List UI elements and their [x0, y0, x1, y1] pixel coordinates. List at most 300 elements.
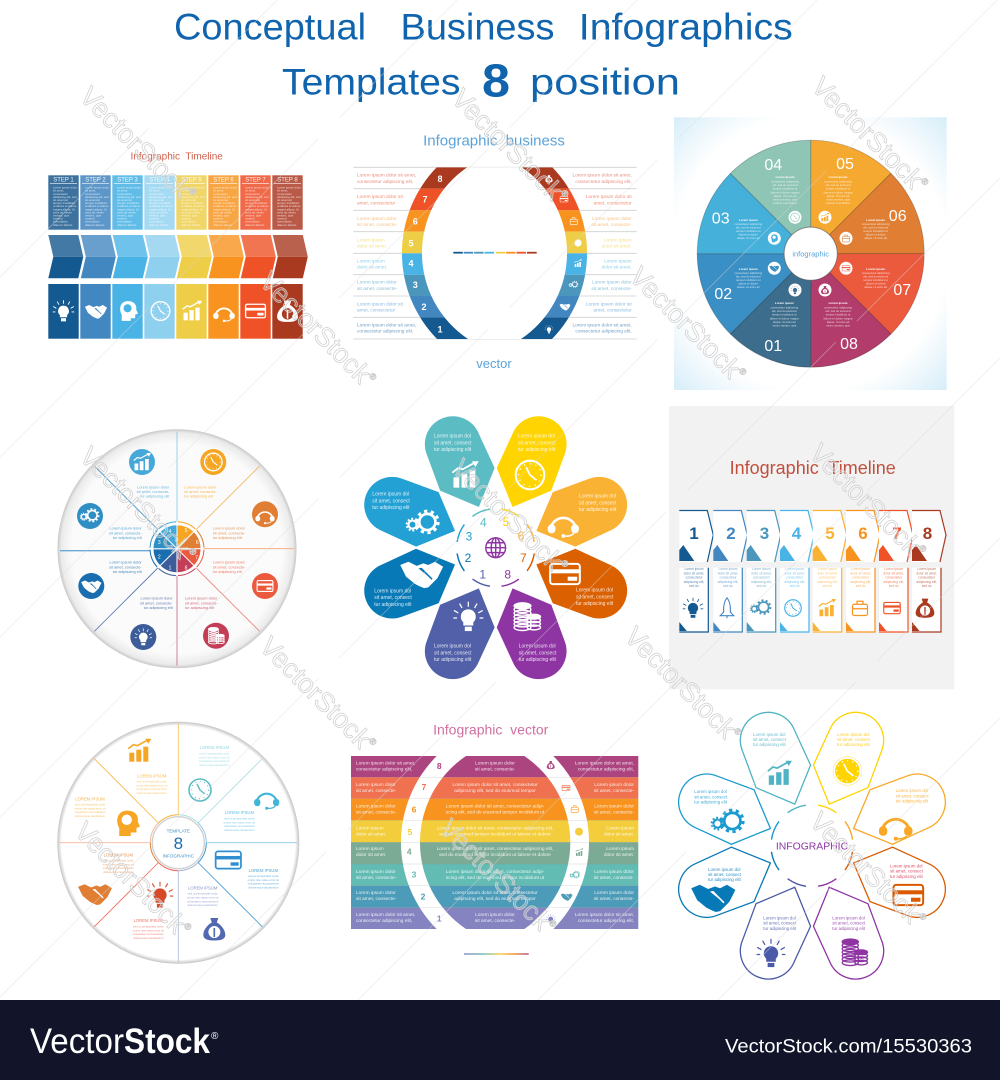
sector text: Lorem ipsum	[866, 218, 885, 222]
sector text: sed ut perspiciatis unde	[199, 752, 229, 756]
sector text: Lorem ipsum dolor	[109, 526, 142, 531]
panel: white disc with lorem ipsum	[57, 722, 299, 964]
sector text: consectetur adipiscing	[824, 180, 852, 184]
sector text: LOREM IPSUM	[134, 918, 163, 923]
petal text: sit amet, consect	[576, 594, 614, 600]
left texts: Lorem ipsum dolor sit amet,	[357, 323, 416, 328]
step text: Lorem ipsum	[752, 567, 771, 571]
top text cards: tempor incididunt	[53, 201, 75, 205]
title: 8	[482, 54, 510, 106]
panel: stripes with crescents	[351, 721, 638, 955]
petal text: Lorem ipsum dol	[434, 434, 471, 440]
top text cards: enim ad minim	[277, 210, 296, 214]
left texts: consectetur adipiscing elit,	[357, 179, 413, 185]
top text cards: exercitation	[277, 220, 292, 224]
footer url: VectorStock.com/15530363	[725, 1037, 972, 1058]
icon discs	[768, 211, 852, 296]
sector text: Lorem ipsum dolor	[140, 596, 173, 601]
right text: Lorem ipsum	[606, 847, 634, 852]
top text cards: tempor incididunt	[181, 201, 203, 205]
top text cards: enim ad minim	[85, 210, 104, 214]
sector text: LOREM IPSUM	[104, 852, 133, 858]
left texts: Lorem ipsum	[357, 259, 385, 264]
top text cards: adipiscing elit, sed	[149, 195, 173, 199]
sector text: doloremque laudantium	[248, 885, 279, 889]
watermarks: VectorStock	[74, 81, 197, 204]
hub label: TEMPLATE	[167, 828, 190, 834]
sector text: consectetur adipiscing	[862, 222, 890, 226]
centre text: scing elit, sed do eiusmod tempor incididunt ut	[446, 875, 545, 881]
sector text: tur adipiscing elit	[185, 605, 215, 610]
title: Infographics	[579, 6, 793, 47]
sector text: labore et dolore	[866, 282, 886, 286]
numbers	[408, 174, 443, 335]
petal text: Lorem ipsum dol	[837, 732, 869, 737]
top text cards: enim ad minim	[181, 210, 200, 214]
arc segments	[402, 167, 588, 339]
step text: dolor sit amet,	[817, 571, 838, 575]
top text cards: consectetur	[117, 192, 132, 196]
pie sectors	[697, 140, 924, 367]
top text cards: exercitation	[181, 220, 196, 224]
top text cards: ullamco laboris	[149, 223, 169, 227]
sector text: tempor incididunt ut	[826, 187, 850, 191]
top text cards: adipiscing elit, sed	[245, 195, 269, 199]
sector text: tur adipiscing elit	[113, 535, 143, 540]
sector text: tur adipiscing elit	[184, 494, 214, 499]
sector text: omnis iste natus error sit	[74, 806, 106, 810]
step text: Lorem ipsum	[785, 567, 804, 571]
sector text: sit amet, consecte-	[109, 564, 142, 569]
top text cards: STEP 3	[117, 178, 138, 184]
left texts: amet, consectetur	[357, 200, 396, 206]
top text cards: adipiscing elit, sed	[53, 195, 77, 199]
sector text: LOREM IPSUM	[200, 745, 229, 750]
left text: Lorem ipsum	[356, 826, 384, 832]
top text cards: sit amet,	[245, 189, 256, 193]
step text: consectetur	[786, 576, 804, 580]
hub pie	[153, 525, 201, 573]
top text cards: STEP 4	[149, 178, 170, 184]
panel: solid petal flower	[355, 407, 636, 688]
sector text: Lorem ipsum dolor	[137, 484, 169, 489]
left texts	[357, 173, 416, 335]
watermarks: ®	[737, 366, 749, 378]
petal text: tur adipiscing elit	[694, 800, 728, 805]
step text: consectetur	[753, 576, 771, 580]
sector text: LOREM IPSUM	[75, 796, 105, 802]
sector text: Lorem ipsum	[866, 267, 885, 271]
petal text: Lorem ipsum dol	[763, 916, 796, 920]
petal text: tur adipiscing elit	[372, 505, 410, 511]
row lines	[351, 777, 638, 908]
sector text: voluptatem accusantium	[136, 787, 168, 791]
top text cards: tempor incididunt	[117, 201, 139, 205]
top text cards: ullamco laboris	[277, 223, 297, 227]
numbers: 02	[714, 286, 732, 303]
top text cards: consectetur	[181, 192, 196, 196]
watermarks: VectorStock	[804, 806, 927, 929]
top text cards: veniam, quis	[213, 214, 230, 218]
right texts: Lorem ipsum	[604, 239, 632, 244]
sector text: minim veniam, quis	[826, 198, 851, 202]
right texts: Lorem ipsum dolor sit	[586, 302, 632, 307]
sector text: voluptatem accusantium	[187, 899, 219, 903]
sector text: Lorem ipsum dolor	[185, 596, 217, 601]
sector text: labore et dolore magna	[824, 316, 853, 320]
step text: dolor sit amet,	[916, 571, 937, 575]
sector text: tempor incididunt ut	[773, 187, 797, 191]
step icons	[683, 598, 934, 618]
petal text: Lorem ipsum dol	[694, 789, 727, 794]
petal text: tur adipiscing elit	[837, 742, 870, 747]
left texts: Lorem ipsum dolor	[357, 217, 397, 222]
top text cards: consectetur	[213, 192, 228, 196]
top text cards: veniam, quis	[277, 214, 294, 218]
panel: step timeline	[48, 151, 308, 339]
centre text	[437, 760, 553, 924]
numbers: 5	[408, 238, 414, 248]
petal text: sit amet, consect	[896, 793, 929, 798]
step text	[684, 567, 937, 588]
centre text: sit amet, consecte-	[475, 766, 516, 772]
watermarks: VectorStock	[624, 261, 747, 384]
numbers: 3	[413, 280, 418, 290]
step text: sed do	[889, 584, 899, 588]
top text cards: do eiusmod	[149, 198, 164, 202]
top text cards: nostrud	[149, 217, 159, 221]
top text cards: ut labore et dolore	[53, 204, 77, 208]
petal text: tur adipiscing elit	[434, 657, 472, 663]
top text cards: consectetur	[245, 192, 260, 196]
left texts: Lorem ipsum dolor sit	[357, 302, 403, 307]
sector text: LOREM IPSUM	[249, 868, 278, 873]
centre dashes	[453, 252, 537, 254]
sector text: elit, sed do eiusmod	[826, 183, 851, 187]
right text: Lorem ipsum dolor	[594, 891, 634, 896]
petal outlines	[670, 703, 954, 988]
right icons	[546, 761, 583, 924]
step text: adipiscing elit,	[684, 580, 704, 584]
top text cards: do eiusmod	[277, 198, 292, 202]
sector text: minim veniam, quis	[826, 324, 851, 328]
petal text: Lorem ipsum dol	[708, 867, 740, 872]
footer logo: ®	[211, 1031, 219, 1042]
step text: sed do	[790, 584, 800, 588]
top text cards: magna aliqua. Ut	[181, 207, 203, 211]
top text cards: ut labore et dolore	[277, 204, 301, 208]
sector text: tempor incididunt ut	[736, 278, 761, 282]
top text cards: Lorem ipsum dolor	[245, 186, 269, 190]
sector text: sed ut perspiciatis unde	[188, 892, 218, 896]
sector text: sit amet, consecte-	[109, 530, 142, 535]
step text: consectetur	[918, 576, 936, 580]
heading: Infographic Timeline	[131, 151, 223, 162]
row lines	[353, 167, 637, 339]
petal text: tur adipiscing elit	[763, 926, 797, 931]
sector text: sit amet, consecte-	[140, 600, 173, 605]
top text cards: ullamco laboris	[245, 223, 265, 227]
step text: adipiscing elit,	[718, 580, 738, 584]
numbers: 06	[889, 208, 907, 225]
sector text: omnis iste natus error sit	[133, 928, 164, 932]
petal text: sit amet, consect	[763, 921, 797, 926]
right text: Lorem ipsum dolor	[594, 783, 634, 788]
step text: sed do	[922, 584, 932, 588]
top text cards: Lorem ipsum dolor	[117, 186, 141, 190]
sector text: consectetur adipiscing	[824, 306, 852, 310]
step numbers: 8	[923, 524, 932, 543]
top text cards: adipiscing elit, sed	[277, 195, 301, 199]
ring numbers: 6	[518, 529, 525, 543]
top text cards: adipiscing elit, sed	[181, 195, 205, 199]
top text cards: sit amet,	[53, 189, 64, 193]
top text cards: nostrud	[117, 217, 127, 221]
sector text: aliqua. Ut enim ad	[864, 236, 887, 240]
top text cards: exercitation	[149, 220, 164, 224]
panel: outlined timeline	[669, 406, 954, 689]
watermarks: ®	[559, 558, 571, 570]
petal text: Lorem ipsum dol	[753, 732, 785, 737]
centre text: Lorem ipsum dolor sit amet, consectetur	[452, 891, 538, 896]
sector text: tur adipiscing elit	[113, 569, 143, 574]
sector text: omnis iste natus error sit	[187, 896, 219, 900]
top text cards: ullamco laboris	[53, 223, 73, 227]
top text cards: ut labore et dolore	[181, 204, 205, 208]
watermarks: ®	[367, 736, 379, 748]
left text: sit amet, consecte-	[356, 875, 397, 881]
sector text: tempor incididunt ut	[863, 229, 888, 233]
top text cards: do eiusmod	[53, 198, 68, 202]
spokes	[60, 432, 294, 666]
centre text: adipiscing elit, sed do eiusmod tempor	[454, 896, 536, 902]
right texts: Lorem ipsum dolor	[592, 281, 632, 286]
top text cards: magna aliqua. Ut	[213, 207, 235, 211]
watermarks: VectorStock	[619, 621, 742, 744]
top text cards: magna aliqua. Ut	[245, 207, 267, 211]
sector text: aliqua. Ut enim ad	[737, 285, 760, 289]
hub label: 8	[174, 834, 183, 853]
petal text: sit amet, consect	[694, 794, 728, 799]
sector text: tur adipiscing elit	[213, 535, 243, 540]
top text cards: consectetur	[85, 192, 100, 196]
numbers	[407, 761, 442, 924]
petal text: Lorem ipsum dol	[374, 588, 411, 594]
petal text: sit amet, consect	[374, 595, 412, 601]
top text cards: magna aliqua. Ut	[53, 207, 75, 211]
sector text: elit, sed do eiusmod	[772, 309, 797, 313]
right text: sit amet, consecte-	[594, 788, 634, 794]
petal text: Lorem ipsum dol	[579, 494, 616, 500]
sector text: tur adipiscing elit	[213, 569, 243, 574]
top text cards: STEP 2	[85, 178, 106, 184]
top text cards: do eiusmod	[117, 198, 132, 202]
step text: consectetur	[719, 576, 737, 580]
left texts: Lorem ipsum dolor sit	[357, 195, 403, 200]
left texts: consectetur adipiscing elit,	[357, 329, 413, 335]
right text: Lorem ipsum dolor	[594, 870, 634, 875]
step text: dolor sit amet,	[751, 571, 772, 575]
sector text: aliqua. Ut enim ad	[774, 194, 797, 198]
top text cards: sit amet,	[277, 189, 288, 193]
sector text: voluptatem accusantium	[248, 882, 279, 886]
ring numbers: 5	[503, 515, 510, 529]
sector text: labore et dolore	[739, 232, 758, 236]
colour rows	[351, 756, 638, 929]
sector text: sed ut perspiciatis unde	[75, 802, 105, 806]
sector text: omnis iste natus error sit	[248, 878, 279, 882]
sector text: LOREM IPSUM	[225, 810, 254, 815]
left text: Lorem ipsum dolor	[356, 783, 396, 788]
sector text: Lorem ipsum dolor	[184, 484, 217, 489]
petal text: Lorem ipsum dol	[896, 788, 928, 793]
step numbers: 2	[726, 524, 736, 543]
top text cards: adipiscing elit, sed	[85, 195, 109, 199]
hub numbers: 1	[169, 566, 172, 572]
watermarks: ®	[367, 371, 379, 383]
top text cards: sit amet,	[213, 189, 224, 193]
petal text: tur adipiscing elit	[708, 877, 741, 882]
sector text: doloremque laudantium	[224, 828, 255, 832]
top text cards: consectetur	[149, 192, 164, 196]
hub label	[163, 828, 195, 858]
sector text: tempor incididunt ut	[863, 278, 888, 282]
sector text: minim veniam, quis	[772, 324, 797, 328]
petal text: tur adipiscing elit	[832, 926, 866, 931]
ring numbers: 1	[479, 567, 486, 581]
top text cards	[48, 175, 303, 230]
numbers: 2	[421, 891, 426, 901]
top text cards: enim ad minim	[245, 210, 264, 214]
petal text: tur adipiscing elit	[896, 799, 929, 804]
watermarks: VectorStock	[434, 813, 557, 936]
right texts: consectetur adipiscing elit,	[575, 179, 632, 185]
left text: Lorem ipsum dolor sit amet,	[356, 761, 415, 766]
step text: sed do	[723, 584, 733, 588]
top text cards: ullamco laboris	[117, 223, 137, 227]
left text: sit amet, consecte-	[356, 788, 397, 794]
left texts: dolor sit amet.	[357, 244, 387, 250]
sector text: Lorem ipsum	[739, 267, 758, 271]
left text: consectetur adipiscing elit,	[356, 918, 412, 924]
heading: Infographic business	[423, 133, 565, 150]
top text cards: ut labore et dolore	[149, 204, 173, 208]
top text cards: sit amet,	[117, 189, 128, 193]
hub numbers: 5	[185, 528, 188, 534]
sector text: omnis iste natus error sit	[224, 820, 255, 824]
centre text: adipiscing elit, sed do eiusmod tempor	[454, 788, 536, 794]
sector text: aliqua. Ut enim ad	[737, 236, 760, 240]
disc	[57, 722, 299, 964]
right text: dolor sit amet.	[604, 832, 634, 838]
sector text: Lorem ipsum	[829, 175, 848, 179]
watermarks: ®	[547, 918, 559, 930]
sector text: tempor incididunt ut	[736, 229, 761, 233]
petal text: Lorem ipsum dol	[372, 492, 409, 498]
footer logo	[30, 1022, 219, 1061]
right texts: Lorem ipsum dolor sit amet,	[573, 174, 632, 179]
petal text: sit amet, consect	[434, 650, 472, 656]
top text cards: enim ad minim	[149, 210, 168, 214]
right texts: sit amet, consecte-	[591, 286, 632, 292]
top text cards: nostrud	[277, 217, 287, 221]
centre text: scing elit, sed do eiusmod tempor incididunt ut	[446, 810, 545, 816]
top text cards: magna aliqua. Ut	[85, 207, 107, 211]
step text: sed do	[689, 584, 699, 588]
sector text: sit amet, consecte-	[185, 600, 218, 605]
watermarks: VectorStock	[446, 453, 569, 576]
sector text: sit amet, consecte-	[137, 489, 170, 494]
centre text: Lorem ipsum dolor sit amet, consectetur adipi-	[446, 870, 544, 875]
hub numbers: 8	[185, 566, 188, 572]
grey background	[669, 406, 954, 689]
sector text: labore et dolore magna	[771, 190, 800, 194]
petal text	[372, 434, 617, 663]
right texts: consectetur adipiscing elit,	[575, 329, 632, 335]
watermarks: VectorStock	[804, 438, 927, 561]
centre text: Lorem ipsum dolor sit amet, consectetur adipiscing elit,	[437, 826, 553, 832]
numbers: 6	[413, 216, 418, 226]
watermarks: VectorStock	[254, 631, 377, 754]
hub	[784, 227, 837, 280]
top text cards: tempor incididunt	[85, 201, 107, 205]
left texts: Lorem ipsum dolor sit amet,	[357, 174, 416, 179]
top text cards: tempor incididunt	[245, 201, 267, 205]
sector text: tempor incididunt ut	[772, 313, 797, 317]
top text cards: nostrud	[181, 217, 191, 221]
panel: outlined petal flower	[670, 703, 954, 988]
ring numbers: 4	[480, 516, 487, 530]
step text: consectetur	[685, 576, 703, 580]
centre text: Lorem ipsum dolor	[475, 913, 515, 918]
step text: consectetur	[885, 576, 903, 580]
right text	[575, 760, 634, 924]
hub ring	[139, 803, 218, 882]
sector text: aliqua. Ut enim ad	[864, 285, 887, 289]
icon: globe	[486, 538, 506, 558]
petal text: sit amet, consect	[890, 869, 924, 874]
watermarks: VectorStock	[254, 266, 377, 389]
right texts: dolor sit amet.	[602, 244, 632, 250]
sector text: LOREM IPSUM	[188, 886, 218, 890]
hub numbers: 7	[195, 555, 198, 561]
step text: adipiscing elit,	[784, 580, 805, 584]
petal icons	[400, 461, 580, 631]
numbers: 01	[764, 338, 782, 355]
top text cards: adipiscing elit, sed	[213, 195, 237, 199]
right text: Lorem ipsum	[606, 826, 634, 832]
ring numbers	[465, 515, 527, 581]
panel: arc business	[353, 133, 637, 371]
sector text: sed ut perspiciatis unde	[137, 780, 167, 784]
left text: dolor sit amet.	[356, 852, 386, 858]
right text: sit amet, consecte-	[594, 810, 634, 816]
caption: vector	[476, 356, 512, 371]
step text: sed do	[756, 584, 767, 588]
sector text: doloremque laudantium	[103, 870, 134, 874]
step text: dolor sit amet,	[684, 571, 704, 575]
left text: consectetur adipiscing elit,	[356, 766, 412, 772]
petal text: sit amet, consect	[519, 650, 557, 656]
sector text: nostrud exercitation	[773, 201, 798, 205]
top text cards: exercitation	[213, 220, 228, 224]
numbers: 8	[437, 174, 443, 184]
sector text: Lorem ipsum dolor	[109, 560, 142, 565]
step text: dolor sit amet,	[850, 571, 871, 575]
right texts: Lorem ipsum dolor sit	[586, 195, 632, 200]
sector text: omnis iste natus error sit	[103, 862, 134, 866]
top text cards: veniam, quis	[245, 214, 262, 218]
